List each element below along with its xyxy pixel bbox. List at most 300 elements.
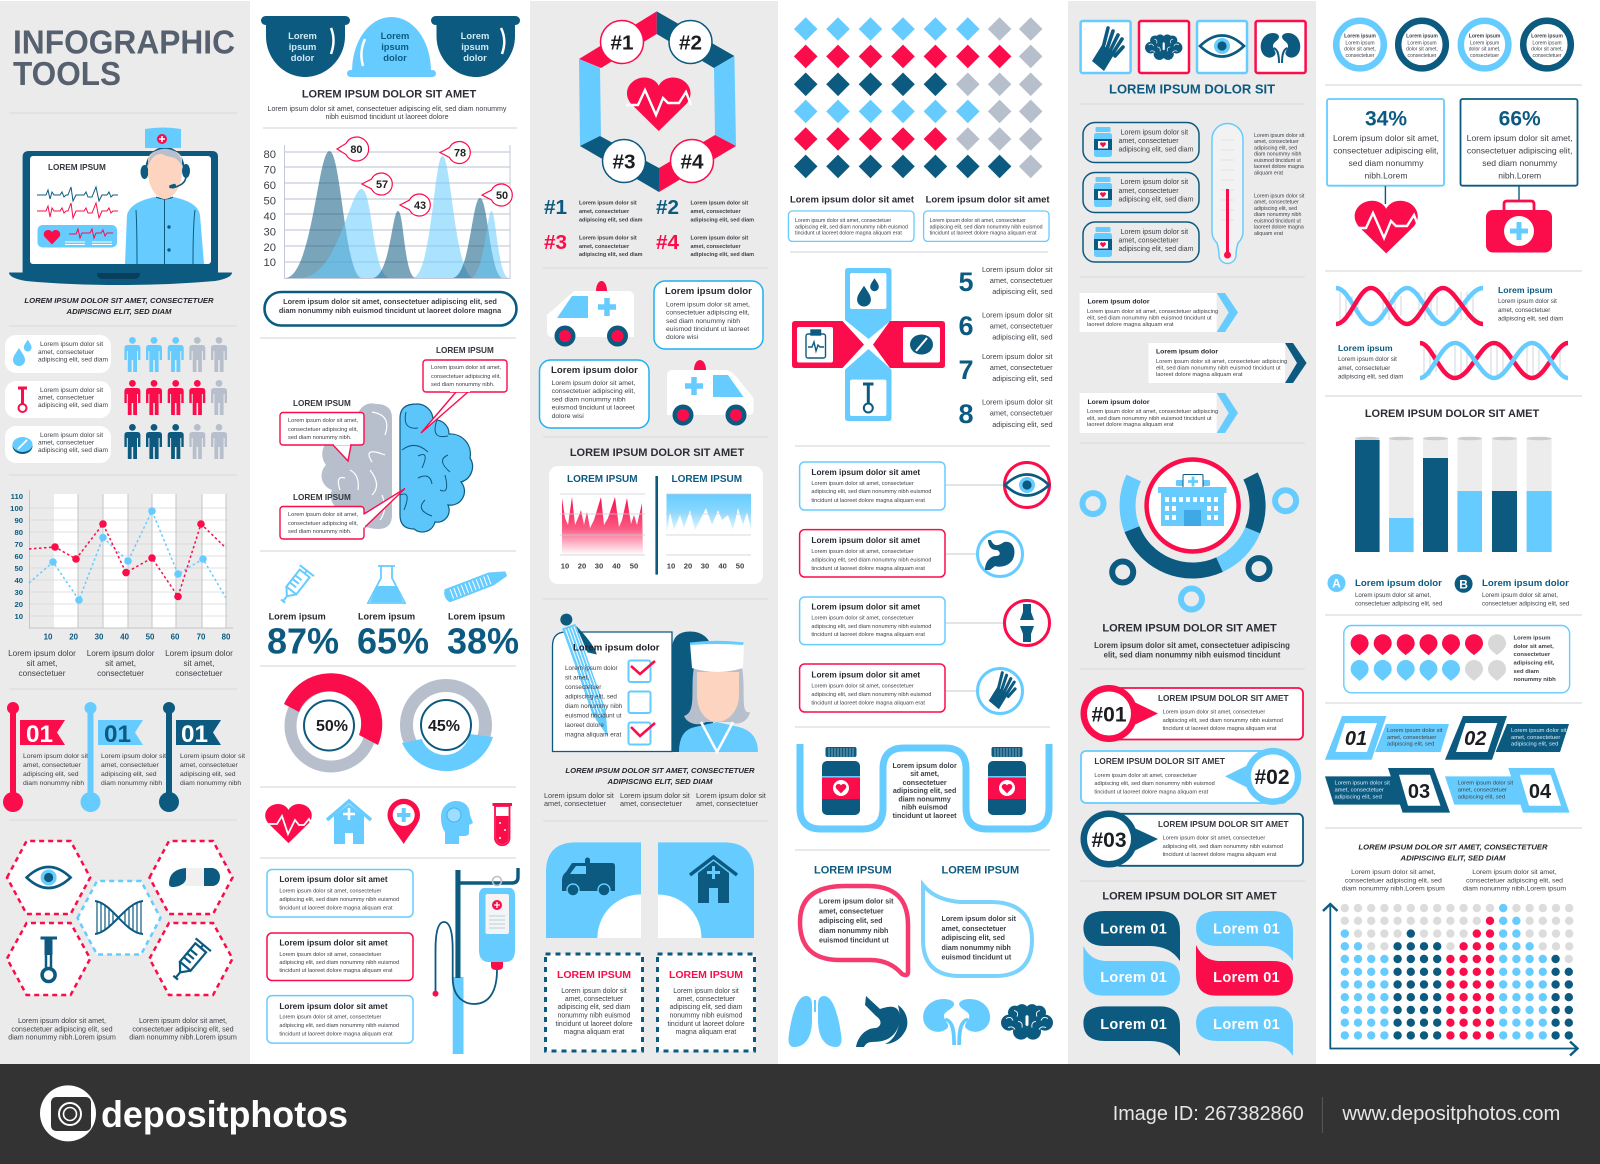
icon: pill xyxy=(910,334,933,354)
pin flag 01 blue: adipiscing elit, sed xyxy=(101,771,157,778)
pin flag 01 blue: amet, consectetuer xyxy=(101,762,160,769)
organ box 3 joint xyxy=(800,597,1050,646)
bowl tabs: Lorem xyxy=(288,30,317,41)
text box red: Lorem ipsum dolor sit amet, consectetuer xyxy=(279,952,382,958)
nurse with clipboard: euismod tincidunt ut xyxy=(565,712,622,720)
line chart captions xyxy=(8,649,233,678)
heading: chart: Lorem ipsum dolor sit amet, consectetuer adipiscing elit, sed diam nonummy xyxy=(268,106,507,113)
diamond captions: Lorem ipsum dolor sit amet, consectetuer xyxy=(795,218,892,224)
heart xyxy=(626,78,691,131)
pin flag 01 red: amet, consectetuer xyxy=(23,762,82,769)
diamond captions: adipiscing elit, sed diam nonummy nibh euismod xyxy=(795,225,908,231)
ring badges: consectetuer xyxy=(1533,53,1562,59)
dna strand 2 xyxy=(1420,343,1568,378)
organ box 3 joint: Lorem ipsum dolor sit amet xyxy=(811,602,920,612)
numbered legend: adipiscing elit, sed diam xyxy=(690,252,754,258)
parallelogram step 01: adipiscing elit, sed xyxy=(1387,742,1434,748)
hexagon captions: consectetuer adipiscing elit, sed xyxy=(132,1026,234,1034)
thermometer notes: adipiscing elit, sed xyxy=(1254,145,1297,151)
heading: organs: LOREM IPSUM DOLOR SIT xyxy=(1109,82,1275,97)
icon: house xyxy=(327,801,371,844)
drop rating box: consectetuer xyxy=(1514,652,1551,658)
icon: hospital xyxy=(1158,474,1226,526)
thermometer xyxy=(1212,124,1243,264)
stat row: thermometer: amet, consectetuer xyxy=(38,394,95,402)
ring badges: Lorem ipsum xyxy=(1344,34,1376,40)
people pictogram grid xyxy=(124,337,227,459)
line chart captions: sit amet, xyxy=(184,659,214,668)
organ box 1 eye: tincidunt ut laoreet dolore magna aliquam erat xyxy=(811,498,925,504)
stat card 66% with first aid kit: sed diam nonummy xyxy=(1482,158,1558,168)
brain callout top right: sed diam nonummy nibh. xyxy=(431,382,495,388)
area chart: 30 xyxy=(264,226,276,238)
organ box 4 hand bones: Lorem ipsum dolor sit amet xyxy=(811,670,920,680)
stat: syringe 87% xyxy=(267,565,339,661)
donut 45% xyxy=(402,686,493,771)
dna strand 1 text xyxy=(1498,285,1563,322)
satellite rings xyxy=(1082,490,1296,610)
text box blue 1: tincidunt ut laoreet dolore magna aliquam erat xyxy=(279,905,393,911)
nurse with clipboard: diam nonummy nibh xyxy=(565,703,623,710)
bowl tabs: dolor xyxy=(291,52,315,63)
line chart captions: consectetuer xyxy=(176,669,223,678)
speech bubble blue: Lorem ipsum dolor sit xyxy=(942,915,1017,923)
pin flag 01 dark: adipiscing elit, sed xyxy=(180,771,236,778)
nurse caption: Lorem ipsum dolor sit xyxy=(544,791,614,800)
stat card 34% with heart: consectetuer adipiscing elit, xyxy=(1333,146,1439,156)
stat card 66% with first aid kit: 66% xyxy=(1499,108,1541,131)
numbered list 5-8: adipiscing elit, sed xyxy=(992,374,1053,383)
area chart: 50 xyxy=(496,190,508,202)
area chart: 40 xyxy=(264,211,276,223)
bowl tabs: dolor xyxy=(463,52,487,63)
stat: flask 65% xyxy=(357,566,429,661)
line chart captions: Lorem ipsum dolor xyxy=(87,649,155,658)
speech bubble red: Lorem ipsum dolor sit xyxy=(819,898,894,906)
brain callout bottom: consectetuer adipiscing elit, xyxy=(288,521,358,527)
image id and site: www.depositphotos.com xyxy=(1341,1102,1560,1125)
depositphotos logo xyxy=(40,1085,348,1141)
line chart: 90 xyxy=(14,516,23,525)
ring badges: Lorem ipsum xyxy=(1531,34,1563,40)
ambulance right facing xyxy=(667,360,754,426)
thermometer notes: Lorem ipsum dolor sit xyxy=(1254,133,1305,139)
step card #02 xyxy=(1081,748,1301,805)
bar legend B: Lorem ipsum dolor xyxy=(1482,578,1569,589)
line chart: 50 xyxy=(146,632,155,642)
diamond captions: tincidunt ut laoreet dolore magna aliquam erat xyxy=(795,231,902,237)
area chart xyxy=(264,137,512,278)
parallelogram step 04: 04 xyxy=(1529,781,1552,803)
data callouts xyxy=(337,137,512,216)
circle #3 xyxy=(602,140,646,182)
arrow box 1: elit, sed diam nonummy nibh euismod tincidunt ut xyxy=(1087,316,1212,322)
drop rating box: nonummy nibh xyxy=(1514,677,1556,683)
medicine pill row 3: adipiscing elit, sed diam xyxy=(1118,246,1194,253)
dot chart caption: LOREM IPSUM DOLOR SIT AMET, CONSECTETUER xyxy=(1358,843,1548,852)
stat: thermometer 38% xyxy=(442,567,519,661)
step card #03: #03 xyxy=(1091,829,1127,852)
donut 45%: 45% xyxy=(428,718,460,735)
brain callout bottom: Lorem ipsum dolor sit amet, xyxy=(288,512,359,518)
ambulance text box 2: Lorem ipsum dolor xyxy=(551,365,638,376)
numbered list 5-8: amet, consectetuer xyxy=(990,363,1053,372)
ring badges: consectetuer xyxy=(1408,53,1437,59)
pin flag 01 red: Lorem ipsum dolor sit xyxy=(23,753,88,760)
step card #01: adipiscing elit, sed diam nonummy nibh euismod xyxy=(1163,718,1283,724)
text box blue 1: Lorem ipsum dolor sit amet xyxy=(279,875,388,884)
drop rating box: adipiscing elit, xyxy=(1514,661,1555,667)
numbered legend: amet, consectetuer xyxy=(690,209,741,215)
organ box 3 joint: adipiscing elit, sed diam nonummy nibh euismod xyxy=(811,624,931,630)
nurse caption: ADIPISCING ELIT, SED DIAM xyxy=(607,777,713,786)
dashed box right: tincidunt ut laoreet dolore xyxy=(667,1021,745,1028)
arrow box 3: Lorem ipsum dolor xyxy=(1088,399,1150,406)
drop rating box: sed diam xyxy=(1514,669,1539,675)
stat: flask 65%: Lorem ipsum xyxy=(358,612,415,622)
line chart: 30 xyxy=(95,632,104,642)
ambulance text box 1: euismod tincidunt ut laoreet xyxy=(666,326,749,333)
brain callout top right: consectetuer adipiscing elit, xyxy=(431,374,501,380)
circle #4 xyxy=(670,140,714,182)
parallelogram step 02: adipiscing elit, sed xyxy=(1511,742,1558,748)
parallelogram step 01 xyxy=(1325,716,1449,760)
step card #03: Lorem ipsum dolor sit amet, consectetuer xyxy=(1163,836,1265,842)
brain callout top right: LOREM IPSUM xyxy=(436,346,494,355)
line chart captions: Lorem ipsum dolor xyxy=(165,649,233,658)
icon: eye hexagon xyxy=(27,867,71,888)
parallelogram step 01: 01 xyxy=(1345,728,1367,750)
laptop caption: ADIPISCING ELIT, SED DIAM xyxy=(66,307,172,316)
ring badges: Lorem ipsum xyxy=(1469,34,1501,40)
numbered list 5-8: Lorem ipsum dolor sit xyxy=(982,310,1053,320)
medicine pill row 1 xyxy=(1083,122,1199,162)
numbered list 5-8: Lorem ipsum dolor sit xyxy=(982,398,1053,407)
heading: chart: LOREM IPSUM DOLOR SIT AMET xyxy=(302,88,476,100)
hexagon captions xyxy=(8,1017,237,1042)
diamond captions: tincidunt ut laoreet dolore magna aliquam erat xyxy=(930,231,1037,237)
step card #03: LOREM IPSUM DOLOR SIT AMET xyxy=(1158,820,1289,829)
numbered list 5-8: 7 xyxy=(958,355,974,385)
stat row: thermometer xyxy=(5,381,111,418)
bar legend B: consectetuer adipiscing elit, sed xyxy=(1482,601,1570,608)
pin flag 01 red xyxy=(3,702,88,812)
dna strand 2 text: Lorem ipsum xyxy=(1338,343,1393,353)
arrow box 3: elit, sed diam nonummy nibh euismod tincidunt ut xyxy=(1087,416,1212,422)
stat card 34% with heart: Lorem ipsum dolor sit amet, xyxy=(1333,133,1439,143)
text box blue 2: Lorem ipsum dolor sit amet, consectetuer xyxy=(279,1015,382,1021)
numbered legend: amet, consectetuer xyxy=(579,209,630,215)
numbered list 5-8: 6 xyxy=(958,311,974,341)
dashed box left: tincidunt ut laoreet dolore xyxy=(555,1021,633,1028)
hospital caption xyxy=(1094,622,1290,659)
medicine pipe: adipiscing elit, sed xyxy=(893,787,956,795)
line chart: 30 xyxy=(14,588,23,597)
panel dividers xyxy=(9,85,1582,881)
thermometer notes: Lorem ipsum dolor sit xyxy=(1254,194,1305,200)
dashed box left: amet, consectetuer xyxy=(565,996,624,1003)
heading: chart xyxy=(268,88,507,121)
bar legend B xyxy=(1455,575,1570,608)
image id and site xyxy=(1113,1097,1560,1133)
organ box 3 joint: Lorem ipsum dolor sit amet, consectetuer xyxy=(811,616,914,622)
organ box 2 stomach: Lorem ipsum dolor sit amet xyxy=(811,535,920,545)
line chart: 80 xyxy=(222,632,231,642)
medicine pipe: Lorem ipsum dolor xyxy=(892,762,957,770)
text box blue 1 xyxy=(267,870,413,917)
pin flag 01 blue: Lorem ipsum dolor sit xyxy=(101,753,166,760)
spike charts card: 40 xyxy=(718,562,727,571)
medicine pipe: sit amet, xyxy=(910,770,939,778)
stat row: pill: amet, consectetuer xyxy=(38,440,95,446)
dashed box right: magna aliquam erat xyxy=(676,1029,736,1036)
tile: hospital house xyxy=(658,842,754,938)
stat: syringe 87%: 87% xyxy=(267,620,339,661)
stat row: water drops xyxy=(5,335,111,373)
numbered list 5-8: 8 xyxy=(958,399,974,429)
organ box 4 hand bones: tincidunt ut laoreet dolore magna aliquam erat xyxy=(811,700,925,706)
step card #01: LOREM IPSUM DOLOR SIT AMET xyxy=(1158,694,1289,703)
brain diagram xyxy=(322,403,473,532)
icon: test tube xyxy=(492,803,512,845)
medicine pill row 2: Lorem ipsum dolor sit xyxy=(1121,179,1188,186)
bottle right xyxy=(988,747,1026,815)
numbered legend xyxy=(544,196,754,258)
diamond captions xyxy=(788,194,1050,241)
chart pill caption: Lorem ipsum dolor sit amet, consectetuer adipiscing elit, sed xyxy=(283,297,497,306)
ring badges: Lorem ipsum xyxy=(1470,41,1499,47)
dashed box left xyxy=(546,954,642,1051)
speech bubble blue: euismod tincidunt ut xyxy=(942,954,1012,962)
heading: charts card: LOREM IPSUM DOLOR SIT AMET xyxy=(570,447,744,459)
stat row: pill: Lorem ipsum dolor sit xyxy=(40,432,103,439)
ring badges: Lorem ipsum xyxy=(1532,41,1562,47)
parallelogram step 03 xyxy=(1325,768,1450,813)
hexagon captions: diam nonummy nibh.Lorem ipsum xyxy=(8,1034,116,1042)
ring badges: dolor sit amet, xyxy=(1406,47,1438,53)
ambulance text box 2: consectetuer adipiscing elit, xyxy=(552,388,635,395)
speech bubble red: LOREM IPSUM xyxy=(814,864,892,876)
dashed box right: nonummy nibh euismod xyxy=(670,1012,743,1020)
spike charts card: LOREM IPSUM xyxy=(567,474,638,485)
dot chart axes xyxy=(1323,904,1578,1056)
parallelogram step 03: adipiscing elit, sed xyxy=(1334,795,1382,801)
dot chart caption: consectetuer adipiscing elit, sed xyxy=(1345,878,1442,885)
numbered list 5-8 xyxy=(958,265,1053,429)
step card #01: tincidunt ut laoreet dolore magna aliquam erat xyxy=(1163,726,1277,732)
ribbon dark 1 xyxy=(1083,911,1180,961)
numbered legend: adipiscing elit, sed diam xyxy=(579,218,643,224)
ambulance text box 2: euismod tincidunt ut laoreet xyxy=(552,405,635,412)
hexagon captions: Lorem ipsum dolor sit amet, xyxy=(18,1017,106,1025)
line chart: 20 xyxy=(14,600,23,609)
ribbon blue 1 xyxy=(1083,946,1180,996)
thermometer notes: laoreet dolore magna xyxy=(1254,164,1304,170)
organ box 1 eye xyxy=(800,462,1050,510)
parallelogram step 03: amet, consectetuer xyxy=(1334,788,1384,794)
numbered list 5-8: amet, consectetuer xyxy=(990,276,1053,285)
diamond captions: Lorem ipsum dolor sit amet xyxy=(790,194,915,206)
line chart: 40 xyxy=(120,632,130,642)
arrow box 1: laoreet dolore magna aliquam erat xyxy=(1087,322,1174,328)
dot chart caption: consectetuer adipiscing elit, sed xyxy=(1466,878,1563,885)
organ box 2 stomach: adipiscing elit, sed diam nonummy nibh euismod xyxy=(811,558,931,564)
spike charts card: 40 xyxy=(612,562,621,571)
ribbon blue 2: Lorem 01 xyxy=(1213,922,1280,938)
medicine pill row 1: adipiscing elit, sed diam xyxy=(1118,146,1194,153)
area chart: 50 xyxy=(264,196,276,208)
speech bubble red xyxy=(800,864,908,975)
stat row: water drops: amet, consectetuer xyxy=(38,349,95,356)
iv stand xyxy=(432,868,518,1054)
circle #3: #3 xyxy=(612,150,636,174)
bar legend B: Lorem ipsum dolor sit amet, xyxy=(1482,592,1558,599)
arrow box 3: Lorem ipsum dolor sit amet, consectetuer adipiscing xyxy=(1087,409,1218,415)
stat row: water drops: adipiscing elit, sed diam xyxy=(38,356,109,364)
thermometer notes: diam nonummy nibh xyxy=(1254,151,1301,157)
pin flag 01 red: diam nonummy nibh xyxy=(23,780,84,787)
area chart: 80 xyxy=(264,149,276,161)
title: INFOGRAPHIC xyxy=(13,24,235,60)
ribbon dark 1: Lorem 01 xyxy=(1100,922,1167,938)
line chart captions: consectetuer xyxy=(19,669,66,678)
ring badges: consectetuer xyxy=(1346,53,1375,59)
stat card 66% with first aid kit: consectetuer adipiscing elit, xyxy=(1467,146,1572,156)
text box blue 2 xyxy=(267,996,413,1043)
heading: chart: nibh euismod tincidunt ut laoreet dolore xyxy=(325,114,449,121)
tile: ambulance xyxy=(546,842,641,938)
dot chart caption: diam nonummy nibh.Lorem ipsum xyxy=(1342,886,1445,893)
pin flag 01 blue: 01 xyxy=(104,721,131,748)
bar legend A: A xyxy=(1332,576,1341,590)
icon: syringe hexagon xyxy=(168,938,211,984)
numbered list 5-8: amet, consectetuer xyxy=(990,322,1053,331)
spike charts card: 20 xyxy=(684,562,692,571)
medicine pipe: consectetuer xyxy=(903,779,947,787)
bowl tabs: ipsum xyxy=(461,41,489,52)
text box blue 2: Lorem ipsum dolor sit amet xyxy=(279,1002,388,1011)
thermometer notes: laoreet dolore magna xyxy=(1254,225,1304,231)
ambulance left facing xyxy=(547,281,634,346)
numbered legend: amet, consectetuer xyxy=(579,244,630,250)
parallelogram step 03: Lorem ipsum dolor sit xyxy=(1334,781,1390,787)
ribbon red xyxy=(1196,945,1293,996)
thermometer notes: adipiscing elit, sed xyxy=(1254,206,1297,212)
brain callout bottom: LOREM IPSUM xyxy=(293,493,351,502)
step card #02: adipiscing elit, sed diam nonummy nibh euismod xyxy=(1094,781,1215,787)
icon: brain xyxy=(1001,1004,1053,1040)
brain callout top right xyxy=(421,346,507,433)
heading: ribbons: LOREM IPSUM DOLOR SIT AMET xyxy=(1102,890,1277,902)
step card #02: #02 xyxy=(1254,766,1290,789)
depositphotos logo: depositphotos xyxy=(101,1094,348,1135)
icon square: bones xyxy=(1081,21,1131,73)
stat: syringe 87%: Lorem ipsum xyxy=(269,612,326,622)
area chart: 78 xyxy=(454,148,466,160)
hexagon captions: consectetuer adipiscing elit, sed xyxy=(11,1026,113,1034)
arrow box 2: Lorem ipsum dolor sit amet, consectetuer adipiscing xyxy=(1156,359,1287,365)
step card #01 xyxy=(1080,685,1303,742)
ambulance text box 2: dolore wisi xyxy=(552,413,584,420)
pin flag 01 dark: 01 xyxy=(181,721,208,748)
laptop caption xyxy=(24,296,214,316)
arrow box 2 xyxy=(1148,343,1307,383)
brain callout bottom xyxy=(280,488,405,539)
arrow box 3: laoreet dolore magna aliquam erat xyxy=(1087,422,1174,428)
image id and site: Image ID: 267382860 xyxy=(1113,1102,1304,1125)
hospital ring diagram xyxy=(1082,460,1296,610)
numbered legend: #1 xyxy=(544,196,567,219)
organ box 2 stomach xyxy=(800,530,1022,577)
ambulance text box 2: Lorem ipsum dolor sit amet, xyxy=(552,380,636,387)
dashed box right: adipiscing elit, sed diam xyxy=(670,1004,743,1011)
drop rating box: Lorem ipsum xyxy=(1514,636,1550,642)
checkboxes xyxy=(628,660,650,744)
arrow box 1: Lorem ipsum dolor sit amet, consectetuer adipiscing xyxy=(1087,309,1218,315)
medicine pill row 2: amet, consectetuer xyxy=(1118,188,1179,195)
numbered legend: Lorem ipsum dolor sit xyxy=(690,236,748,242)
nurse caption: amet, consectetuer xyxy=(696,799,759,808)
ambulance text box 1: Lorem ipsum dolor sit amet, xyxy=(666,302,750,308)
dna strand 1 text: Lorem ipsum dolor sit xyxy=(1498,298,1557,305)
dashed box left: magna aliquam erat xyxy=(564,1029,624,1036)
hospital caption: LOREM IPSUM DOLOR SIT AMET xyxy=(1102,622,1277,634)
icon square: kidneys xyxy=(1256,21,1306,73)
nurse caption: amet, consectetuer xyxy=(620,799,683,808)
speech ribbons xyxy=(1083,911,1293,1056)
ribbon red: Lorem 01 xyxy=(1213,970,1280,986)
step card #02: Lorem ipsum dolor sit amet, consectetuer xyxy=(1094,773,1197,779)
nurse with clipboard: adipiscing elit, sed xyxy=(565,693,617,700)
text box red: adipiscing elit, sed diam nonummy nibh euismod xyxy=(279,960,399,966)
icon: dna xyxy=(95,901,143,934)
bar legend A: Lorem ipsum dolor sit amet, xyxy=(1355,592,1431,599)
pin flag 01 red: 01 xyxy=(26,721,53,748)
nurse with clipboard: Lorem ipsum dolor xyxy=(573,643,660,654)
dna strand 1 text: Lorem ipsum xyxy=(1498,285,1553,295)
nurse with clipboard: consectetuer xyxy=(565,684,602,691)
arrow box 2: Lorem ipsum dolor xyxy=(1156,349,1218,356)
laptop with doctor: LOREM IPSUM xyxy=(48,163,106,172)
speech bubble red: amet, consectetuer xyxy=(819,908,884,916)
dot chart caption: Lorem ipsum dolor sit amet, xyxy=(1472,869,1557,876)
medicine pipe xyxy=(800,744,1049,829)
footer bar xyxy=(0,1064,1600,1164)
dashed box right: Lorem ipsum dolor sit xyxy=(673,988,739,995)
spike charts card xyxy=(549,466,763,584)
medicine pipe: diam nonummy xyxy=(898,795,951,803)
stat row: thermometer: Lorem ipsum dolor sit xyxy=(40,387,103,394)
thermometer notes: diam nonummy nibh xyxy=(1254,212,1301,218)
line chart: 80 xyxy=(14,528,23,537)
donut 50%: 50% xyxy=(316,718,348,735)
hexagon cluster xyxy=(7,841,232,995)
ribbon blue 2 xyxy=(1196,911,1293,961)
thermometer notes: euismod tincidunt ut xyxy=(1254,218,1301,224)
ambulance text box 2 xyxy=(540,360,649,428)
dna strand 1 xyxy=(1336,288,1483,324)
area chart: 43 xyxy=(414,200,426,212)
parallelogram step 02: amet, consectetuer xyxy=(1511,735,1560,741)
step card #03: adipiscing elit, sed diam nonummy nibh euismod xyxy=(1163,844,1283,850)
dna strand 1 text: amet, consectetuer xyxy=(1498,307,1550,314)
dot chart caption: ADIPISCING ELIT, SED DIAM xyxy=(1400,854,1506,863)
line chart: 70 xyxy=(14,540,23,549)
organ box 4 hand bones xyxy=(800,664,1022,714)
nurse with clipboard: Lorem ipsum dolor xyxy=(565,665,619,672)
organ box 4 hand bones: Lorem ipsum dolor sit amet, consectetuer xyxy=(811,684,914,690)
icon: clipboard xyxy=(806,330,826,358)
